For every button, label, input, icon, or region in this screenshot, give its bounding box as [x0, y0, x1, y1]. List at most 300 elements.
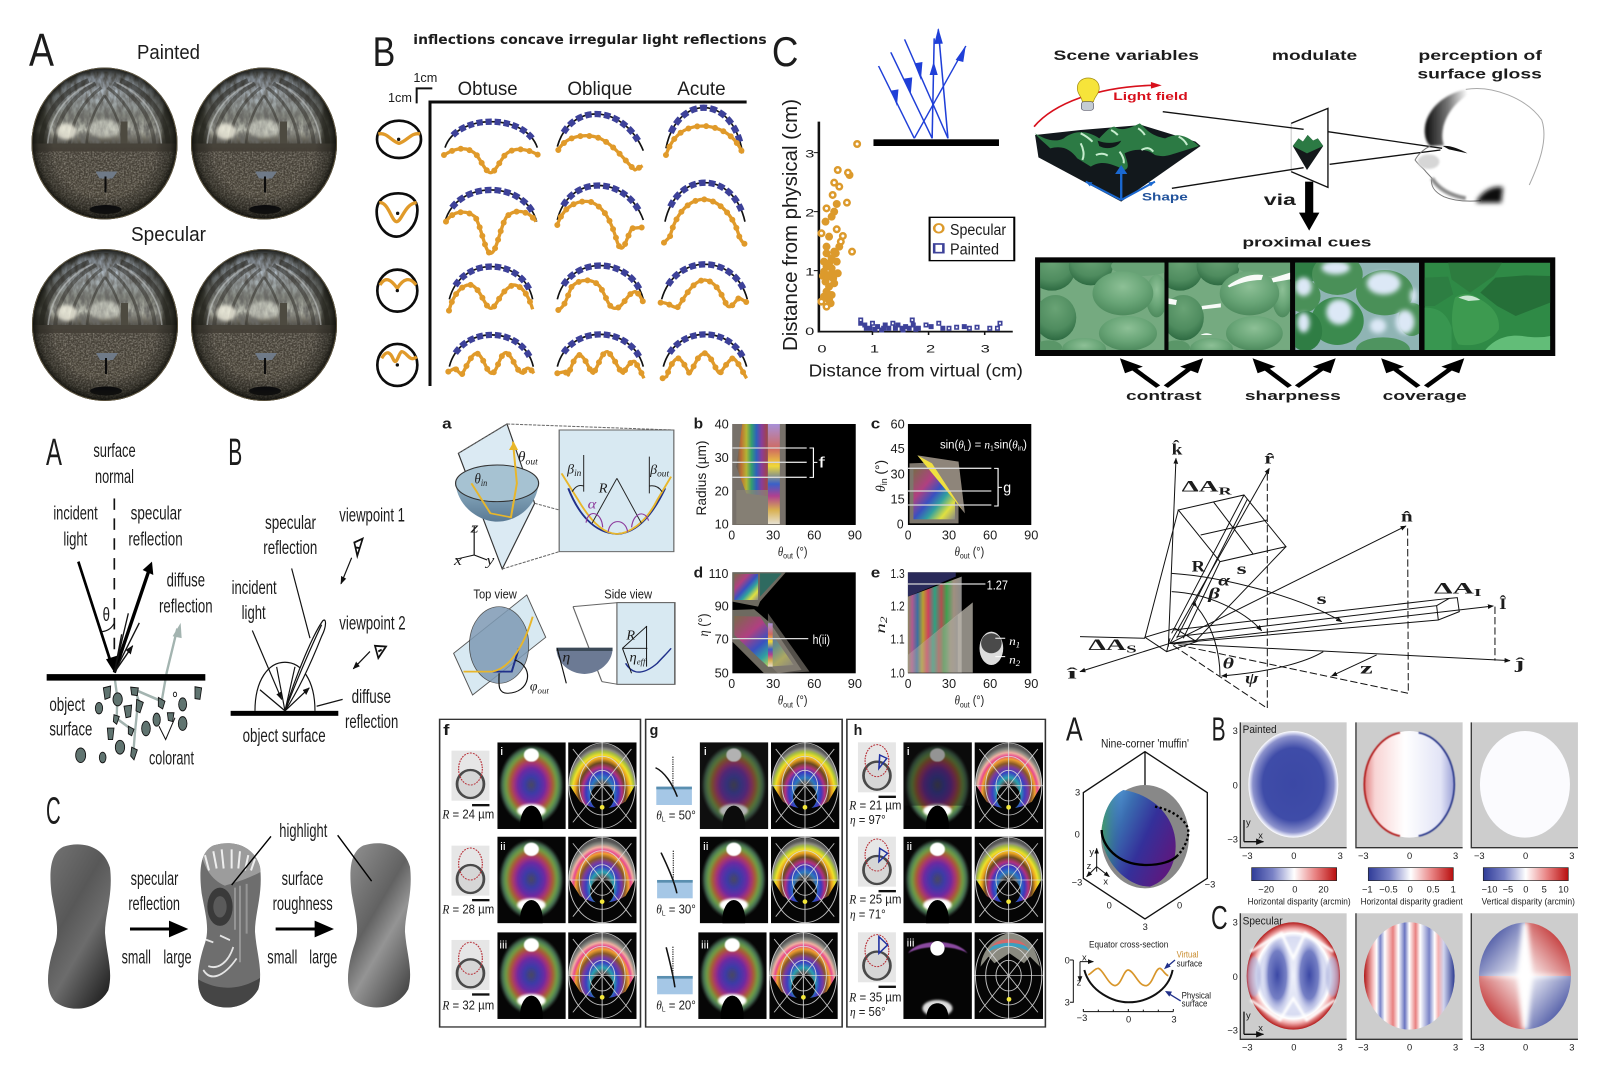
tick labels: −3 [1227, 1026, 1238, 1036]
row i: R = 21 µm [848, 797, 901, 813]
reflection labels: reflection [128, 528, 183, 550]
plot area: 1 [990, 444, 994, 452]
column headings: Obtuse [458, 79, 518, 100]
ticks: 60 [983, 528, 997, 543]
letter f: f [443, 722, 450, 739]
row iii: θ [656, 999, 662, 1013]
row i: L [662, 815, 666, 823]
ticks: 20 [715, 484, 729, 499]
symbols: α [1218, 573, 1232, 590]
side view: eff [637, 657, 647, 666]
row ii: ii [500, 841, 506, 853]
ticks: 1.1 [891, 633, 905, 647]
colorbars: 0 [1408, 884, 1413, 894]
y label e: n [874, 626, 889, 634]
row ii [848, 837, 1043, 940]
frame h [847, 719, 1045, 1027]
legend: Painted [950, 241, 999, 258]
cross-section chart: 0 [1065, 955, 1070, 965]
plot area: L [964, 444, 968, 452]
ticks: 90 [848, 677, 862, 692]
row iii: iii [499, 939, 507, 951]
diagram labels B: diffuse [352, 686, 391, 707]
symbols: ΔA [1434, 580, 1456, 597]
3D box [1083, 752, 1207, 919]
labels C: small [122, 946, 151, 968]
inset: cross-section [559, 430, 674, 552]
map: horizontal disparity gradient [1357, 913, 1463, 1039]
panel letter: e [871, 565, 880, 581]
axis labels [453, 450, 539, 569]
row iii: L [662, 1005, 666, 1013]
row i [848, 742, 1043, 846]
panel: gloss model headings and cues [1054, 48, 1542, 403]
dashed construction lines [1170, 473, 1495, 708]
axis labels: θ [518, 450, 527, 465]
reflection labels: diffuse [167, 569, 205, 591]
tick labels: 0 [1291, 851, 1297, 861]
ticks: 1.0 [891, 666, 905, 681]
row ii: = 30° [666, 901, 696, 916]
row i [656, 742, 839, 846]
colorbars: 0 [1523, 884, 1528, 894]
diagram labels B: viewpoint 1 [339, 504, 405, 526]
tick labels: 0 [1233, 972, 1238, 982]
scatter axes [814, 122, 1013, 335]
colorbars: Horizontal disparity (arcmin) [1248, 896, 1351, 906]
plot area: sin( [994, 437, 1013, 451]
label: Light field: Light field [1113, 91, 1188, 103]
symbols: î [1065, 665, 1078, 682]
panel: C scatter of distance [772, 28, 1023, 380]
inset: cross-section: α [588, 496, 597, 512]
label A: A [46, 431, 62, 474]
arrow via [1264, 182, 1319, 231]
cross-section chart: surface [1182, 999, 1207, 1009]
cue labels: sharpness [1245, 388, 1341, 403]
axes [1240, 913, 1578, 1039]
strip frame [1035, 257, 1555, 356]
diagram: incident and specular rays [47, 498, 205, 753]
colorbars: 20 [1318, 884, 1329, 894]
ticks: 40 [715, 417, 729, 432]
plot area: ) = [968, 437, 984, 451]
heading: Specular: Specular [131, 224, 206, 246]
plot area: θ [1012, 437, 1018, 451]
labels C: small [267, 946, 297, 968]
ticks: out [960, 700, 970, 710]
headings [1054, 48, 1542, 81]
colorbars: Vertical disparity (arcmin) [1482, 896, 1575, 906]
labels C: specular [131, 868, 178, 889]
ticks: 90 [1024, 528, 1038, 543]
panel: gloss scene drawing [1034, 78, 1544, 203]
tick labels: 3 [1453, 1042, 1458, 1052]
label: Shape: Shape [1142, 191, 1188, 204]
plot area [732, 572, 856, 673]
heading: Painted: Painted [137, 42, 200, 64]
reflection labels: surface [93, 440, 136, 461]
colorbars: 5 [1542, 884, 1547, 894]
colorbars: −20 [1258, 884, 1274, 894]
axis ticks: 3 [981, 343, 990, 355]
legend [930, 217, 1014, 261]
plot area: n [1009, 634, 1016, 648]
panel: B outline reconstructions [373, 28, 767, 386]
axes [1240, 722, 1578, 848]
cross-section chart: 0 [1126, 1014, 1131, 1024]
label A: A [1066, 712, 1083, 749]
row ii: L [662, 909, 666, 917]
ticks [715, 417, 862, 561]
tick labels: 3 [1233, 726, 1238, 736]
ticks: out [783, 700, 793, 710]
label C: C [1211, 900, 1228, 937]
diagram labels B: incident [232, 577, 277, 598]
headings: surface gloss [1417, 66, 1542, 81]
cross-section chart: Physical [1182, 990, 1211, 1000]
ticks: 30 [891, 468, 905, 482]
reflection labels: colorant [149, 747, 194, 769]
ticks: 30 [766, 677, 780, 692]
ticks: 50 [715, 666, 729, 681]
tick labels: 3 [1233, 918, 1238, 928]
colorbars [1248, 868, 1575, 906]
label A: A [29, 24, 54, 76]
x axis title: Distance from virtual (cm) [809, 360, 1023, 380]
ticks: out [783, 551, 793, 561]
tick labels: −3 [1227, 834, 1238, 844]
tick labels: 0 [1291, 1042, 1297, 1052]
ticks: 30 [942, 677, 956, 692]
shape: glossy blob [198, 843, 263, 1012]
cue labels [1126, 388, 1467, 403]
tick labels [1227, 918, 1574, 1052]
labels C: large [163, 946, 192, 968]
row i: = 50° [666, 807, 696, 822]
map: horizontal disparity: x [1258, 830, 1263, 840]
arrows and leaders [130, 835, 372, 937]
title: inflections concave irregular light reflections: inflections concave irregular light reflections [413, 33, 767, 48]
row ii [656, 837, 839, 940]
plot area: in [1018, 444, 1023, 452]
inset: cross-section: out [657, 469, 670, 479]
diagram labels B: viewpoint 2 [339, 613, 406, 634]
labels C: highlight [279, 820, 327, 841]
tick labels: 0 [1107, 900, 1112, 910]
headings: modulate [1272, 48, 1357, 63]
tick labels: 3 [1143, 922, 1148, 932]
bowl with ray plane [456, 424, 673, 569]
label C: C [46, 790, 61, 832]
ticks: 10 [715, 518, 729, 532]
symbols: ΔA [1088, 637, 1110, 654]
row iii: R = 35 µm [848, 990, 901, 1005]
map: horizontal disparity [1241, 722, 1347, 848]
symbols: I [1474, 588, 1482, 599]
row i: η = 97° [850, 812, 886, 828]
tick labels: −3 [1358, 1042, 1369, 1052]
y axis title: Distance from physical (cm) [780, 99, 802, 351]
tick labels: 3 [1075, 788, 1080, 798]
chart axes [430, 102, 747, 386]
y label b: Radius (µm) [693, 440, 709, 516]
top view: out [538, 687, 549, 696]
column headings [458, 79, 726, 100]
axis ticks [805, 148, 990, 355]
reflection labels: specular [131, 502, 182, 524]
ticks: 60 [807, 677, 821, 692]
row iii [848, 932, 1043, 1020]
y label d: η (°) [695, 613, 712, 636]
y label c: (°) [872, 460, 888, 478]
scatter: specular points [821, 144, 857, 307]
panel: A B C reflection schematics [46, 431, 411, 1012]
letter h: h [854, 722, 862, 739]
tick labels: 0 [1407, 851, 1412, 861]
row iii: iii [907, 938, 915, 949]
label B: B [1212, 712, 1226, 749]
ticks: 0 [897, 518, 904, 532]
cross-section chart: x [1082, 952, 1087, 962]
diagram labels B: reflection [345, 711, 398, 732]
ticks: (°) [970, 694, 984, 708]
colorbars: 0.5 [1427, 884, 1440, 894]
labels C: surface [282, 868, 323, 889]
chart: row 3 [449, 264, 748, 311]
shape: rough blob [348, 843, 411, 1008]
shape: matte blob [48, 844, 111, 1009]
plot area: g [1003, 480, 1011, 496]
ticks: 45 [891, 442, 905, 457]
diagram labels B [232, 504, 406, 746]
tick labels: 0 [1075, 829, 1080, 839]
ticks: θ [778, 694, 783, 708]
labels C: reflection [128, 893, 180, 914]
map: horizontal disparity gradient [1357, 722, 1463, 848]
ticks: 30 [715, 451, 729, 466]
cross-section title: Equator cross-section [1089, 940, 1168, 950]
chart b: radius [694, 416, 862, 561]
panel letter: c [871, 416, 880, 432]
sphere: specular right [189, 249, 339, 402]
reflection labels: object [49, 694, 85, 715]
row iii: iii [701, 939, 709, 951]
axis labels: z [469, 521, 479, 536]
scatter: painted points [861, 320, 1000, 330]
colorbars: −10 [1482, 884, 1497, 894]
colorbars: 0 [1292, 884, 1298, 894]
ticks: θ [778, 545, 783, 560]
letter g: g [650, 722, 658, 739]
row ii: ii [907, 841, 912, 853]
symbols [1065, 439, 1525, 687]
cue labels: contrast [1126, 388, 1202, 403]
icon: head in profile [1415, 89, 1544, 203]
row ii: η = 71° [850, 906, 886, 922]
panel: A nine-corner muffin [1065, 712, 1215, 1024]
symbols: S [1126, 645, 1137, 656]
map: horizontal disparity: y [1246, 818, 1251, 828]
symbols: r̂ [1264, 450, 1274, 467]
sphere: painted left [30, 68, 180, 220]
arrow via: via [1264, 191, 1296, 209]
tick labels: 3 [1569, 1042, 1574, 1052]
axis ticks: 1 [805, 266, 814, 278]
cross-section chart: 3 [1065, 998, 1070, 1008]
cue labels: coverage [1383, 388, 1467, 403]
cue: dark green [1425, 263, 1550, 350]
plot area: 2 [1016, 659, 1021, 668]
map: horizontal disparity: y [1246, 1010, 1251, 1020]
symbols: z [1360, 660, 1373, 677]
ticks: 1.2 [891, 599, 905, 614]
ticks: 90 [715, 599, 729, 614]
shape icons [377, 121, 421, 386]
icon: colorant particles [76, 686, 202, 763]
colorbars: 10 [1558, 884, 1569, 894]
panel h [847, 719, 1045, 1027]
reflection labels: normal [95, 466, 134, 487]
label a: a [442, 416, 453, 432]
panel: radiometry geometry diagram [1065, 439, 1525, 708]
chart e: refractive index [871, 565, 1038, 710]
y label c: θ [874, 485, 889, 492]
symbols: k̂ [1172, 439, 1182, 458]
ticks [709, 567, 862, 710]
symbols: s [1317, 591, 1327, 608]
map: horizontal disparity: x [1258, 1023, 1263, 1033]
tick labels: 0 [1177, 900, 1182, 910]
axis ticks: 1 [870, 343, 879, 355]
reflection labels: surface [49, 719, 92, 740]
inset: cross-section: β [650, 462, 658, 478]
top view [454, 586, 549, 696]
plot area: sin(θ [940, 437, 965, 451]
ticks: (°) [970, 545, 984, 560]
tick labels: 3 [1569, 851, 1574, 861]
ticks: 60 [891, 417, 905, 432]
tick labels: −3 [1072, 878, 1082, 888]
tick labels: 0 [1233, 780, 1238, 790]
label B: B [228, 431, 242, 474]
headings: Scene variables [1054, 48, 1199, 63]
ticks: 30 [766, 528, 780, 543]
symbols: θ [1223, 655, 1235, 672]
headings: perception of [1418, 48, 1542, 63]
cue: high coverage [1283, 254, 1425, 363]
plot area [908, 572, 1031, 673]
row i [442, 742, 637, 846]
side view: η [630, 651, 637, 665]
scale bar [388, 70, 437, 105]
panel g [646, 719, 842, 1036]
symbols: ΔA [1182, 479, 1203, 496]
axis labels: in [481, 479, 487, 489]
3D terrain [1035, 123, 1201, 202]
ticks [891, 417, 1038, 561]
tick labels: −3 [1474, 1042, 1485, 1052]
panel letter: b [694, 416, 703, 432]
ticks: 0 [905, 677, 911, 692]
row iii: η = 56° [850, 1004, 886, 1020]
side view [556, 586, 675, 684]
reflection labels: reflection [159, 595, 213, 617]
symbols: R [1218, 486, 1232, 497]
symbols: R [1192, 559, 1206, 576]
symbols: s [1237, 561, 1247, 578]
sphere: specular left [30, 249, 180, 402]
ticks: 90 [1024, 677, 1038, 692]
angle arcs [1167, 573, 1377, 676]
plot area: f [819, 455, 826, 471]
side view: R [625, 628, 635, 643]
diagram labels B: object surface [243, 725, 326, 746]
tick labels: −3 [1474, 851, 1485, 861]
3D surface [1101, 785, 1189, 888]
colorbars: −0.5 [1379, 884, 1398, 894]
map: horizontal disparity: Painted [1243, 724, 1277, 736]
ticks: 110 [709, 567, 728, 582]
label C: C [772, 29, 798, 75]
ticks: 15 [891, 493, 905, 507]
tick labels: 0 [1523, 851, 1528, 861]
plot area [908, 424, 1031, 525]
frame f [440, 719, 640, 1027]
axis labels: θ [475, 471, 483, 487]
symbols: Î [1499, 594, 1507, 613]
reflection labels: light [63, 528, 87, 550]
label B: B [373, 28, 395, 75]
top view: φ [530, 680, 539, 694]
ticks: 60 [983, 677, 997, 692]
row iii: = 20° [666, 997, 696, 1012]
axis labels: x [453, 553, 463, 569]
heading: proximal cues: proximal cues [1242, 234, 1371, 250]
chart d: eta [694, 565, 862, 710]
mini axes [1087, 848, 1109, 877]
diagram labels B: specular [265, 512, 316, 533]
row iii: R = 32 µm [442, 997, 494, 1013]
labels C: large [309, 946, 337, 968]
tick labels: −3 [1242, 1042, 1253, 1052]
symbols: β [1207, 585, 1221, 602]
colorbars: −1 [1362, 884, 1373, 894]
arrows: cue pairs [1120, 358, 1464, 387]
axis ticks: 0 [805, 326, 815, 337]
ticks: 0 [728, 677, 735, 692]
row ii: ii [703, 841, 709, 853]
ticks: θ [955, 545, 960, 560]
ticks: 1.3 [891, 567, 905, 582]
cross-section chart: surface [1177, 959, 1202, 969]
inset: cross-section: R [598, 481, 608, 496]
map: vertical disparity [1472, 722, 1578, 848]
tick labels: 0 [1407, 1042, 1412, 1052]
inset: cross-section: in [574, 469, 581, 479]
panel: painted vs specular spheres [29, 24, 339, 402]
chart: row 2 [445, 183, 745, 253]
cross-section chart: 3 [1171, 1014, 1177, 1024]
tick labels: z [1087, 861, 1092, 871]
reflection labels: incident [53, 502, 98, 524]
ticks: 0 [728, 528, 735, 543]
source and incident areas [1080, 598, 1459, 652]
y label e: 2 [879, 616, 889, 623]
reflection labels [49, 440, 213, 769]
row ii: θ [656, 903, 662, 917]
tick labels: 3 [1453, 851, 1458, 861]
